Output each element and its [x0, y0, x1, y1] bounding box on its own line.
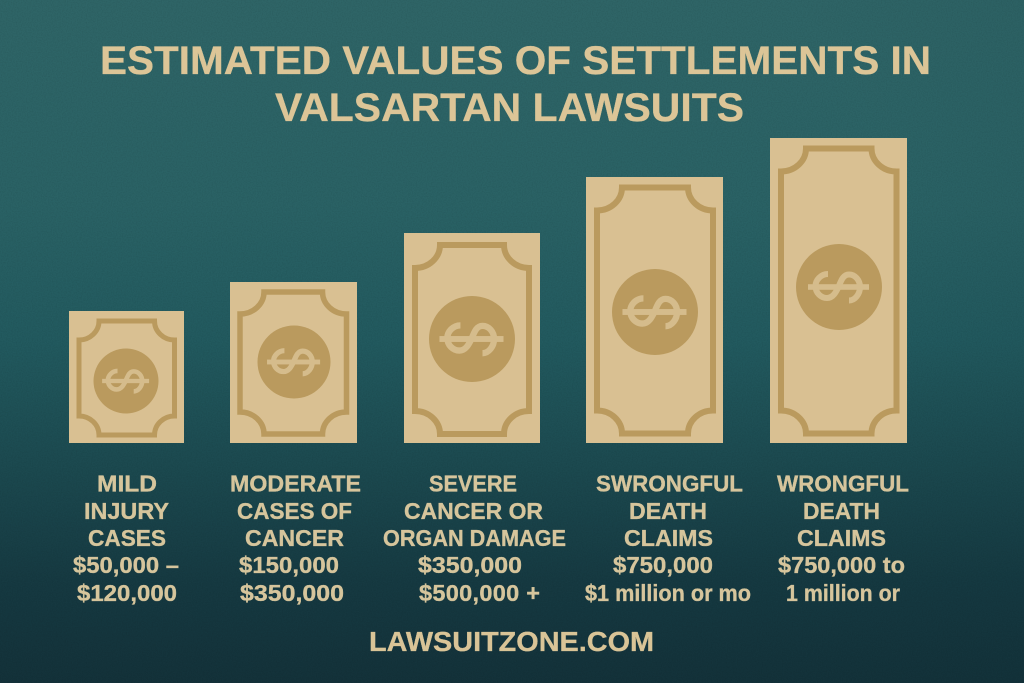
label: wrongful death claims	[777, 470, 909, 606]
title: ESTIMATED VALUES OF SETTLEMENTS IN	[100, 39, 931, 83]
label: mild injury cases: CASES	[88, 525, 166, 551]
label: swrongful death claims	[585, 470, 751, 606]
label: moderate cases of cancer: CANCER	[245, 525, 344, 551]
label: mild injury cases: INJURY	[84, 498, 169, 524]
label: mild injury cases: MILD	[97, 470, 157, 496]
label: severe cancer or organ damage: SEVERE	[429, 470, 517, 496]
label: swrongful death claims: $1 million or mo	[585, 580, 751, 606]
banknote: mild injury	[69, 311, 184, 443]
label: moderate cases of cancer: $350,000	[240, 580, 344, 606]
label: moderate cases of cancer: MODERATE	[230, 470, 361, 496]
label: swrongful death claims: SWRONGFUL	[596, 470, 743, 496]
label: mild injury cases: $120,000	[77, 580, 177, 606]
label: severe cancer or organ damage: $500,000 +	[419, 580, 540, 606]
label: moderate cases of cancer	[230, 470, 361, 606]
label: swrongful death claims: DEATH	[629, 498, 707, 524]
label: mild injury cases: $50,000 –	[73, 552, 179, 578]
banknote: severe cancer or organ damage	[404, 233, 540, 443]
title: VALSARTAN LAWSUITS	[275, 86, 744, 130]
title	[100, 39, 931, 130]
banknote: moderate cancer	[230, 282, 357, 443]
label: mild injury cases	[73, 470, 179, 606]
label: wrongful death claims: DEATH	[803, 498, 880, 524]
banknote: swrongful death claims	[586, 177, 723, 443]
banknote: wrongful death claims	[770, 138, 907, 443]
label: moderate cases of cancer: $150,000	[239, 552, 339, 578]
footer: website: LAWSUITZONE.COM	[369, 626, 654, 657]
label: swrongful death claims: CLAIMS	[624, 525, 713, 551]
label: swrongful death claims: $750,000	[613, 552, 713, 578]
label: wrongful death claims: $750,000 to	[778, 552, 905, 578]
label: wrongful death claims: WRONGFUL	[777, 470, 909, 496]
label: severe cancer or organ damage	[383, 470, 566, 606]
label: wrongful death claims: CLAIMS	[797, 525, 886, 551]
label: severe cancer or organ damage: ORGAN DAMAGE	[383, 525, 566, 551]
label: severe cancer or organ damage: $350,000	[418, 552, 522, 578]
label: moderate cases of cancer: CASES OF	[237, 498, 352, 524]
label: wrongful death claims: 1 million or	[786, 580, 900, 606]
label: severe cancer or organ damage: CANCER OR	[404, 498, 543, 524]
